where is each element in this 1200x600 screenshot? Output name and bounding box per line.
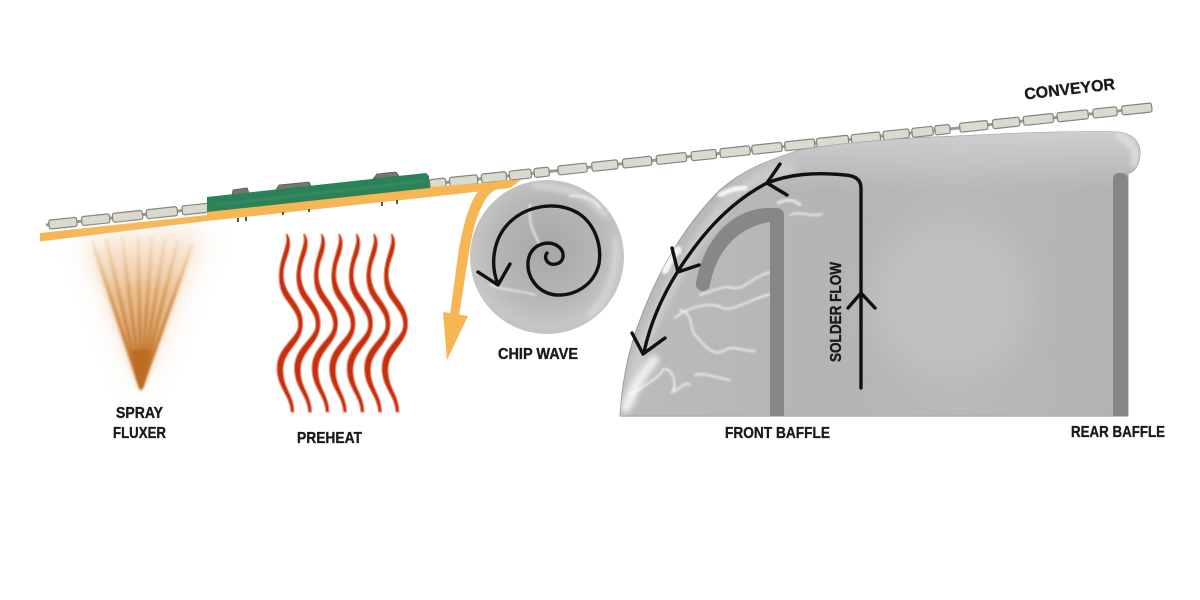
- spray fluxer label: SPRAY: [116, 405, 163, 422]
- PCB board with orange carrier: [40, 172, 521, 242]
- chip wave spiral arrow: [478, 206, 600, 295]
- solder pins: [237, 200, 398, 222]
- rear baffle label: REAR BAFFLE: [1071, 424, 1165, 441]
- chip wave ball: [470, 180, 624, 334]
- preheat waves: [277, 234, 408, 412]
- surface highlights: [628, 168, 790, 400]
- front baffle: [696, 208, 784, 416]
- conveyor label: CONVEYOR: [1024, 76, 1116, 103]
- rear baffle: [1113, 173, 1128, 416]
- green pcb: [207, 173, 430, 212]
- spray fluxer label: FLUXER: [113, 425, 166, 442]
- front baffle label: FRONT BAFFLE: [725, 425, 830, 442]
- orange carrier strip: [40, 180, 521, 242]
- preheat label: PREHEAT: [297, 430, 362, 447]
- solder wave body: [620, 130, 1140, 416]
- pcb components: [232, 172, 399, 195]
- solder streaks: [630, 213, 822, 395]
- conveyor: [46, 103, 1152, 229]
- solder flow arrows: [632, 164, 875, 388]
- spray fluxer: [85, 232, 205, 392]
- orange exit arrow: [443, 180, 515, 360]
- spray fluxer label: [113, 405, 166, 442]
- solder flow label: SOLDER FLOW: [828, 261, 845, 362]
- chip wave label: CHIP WAVE: [498, 346, 578, 363]
